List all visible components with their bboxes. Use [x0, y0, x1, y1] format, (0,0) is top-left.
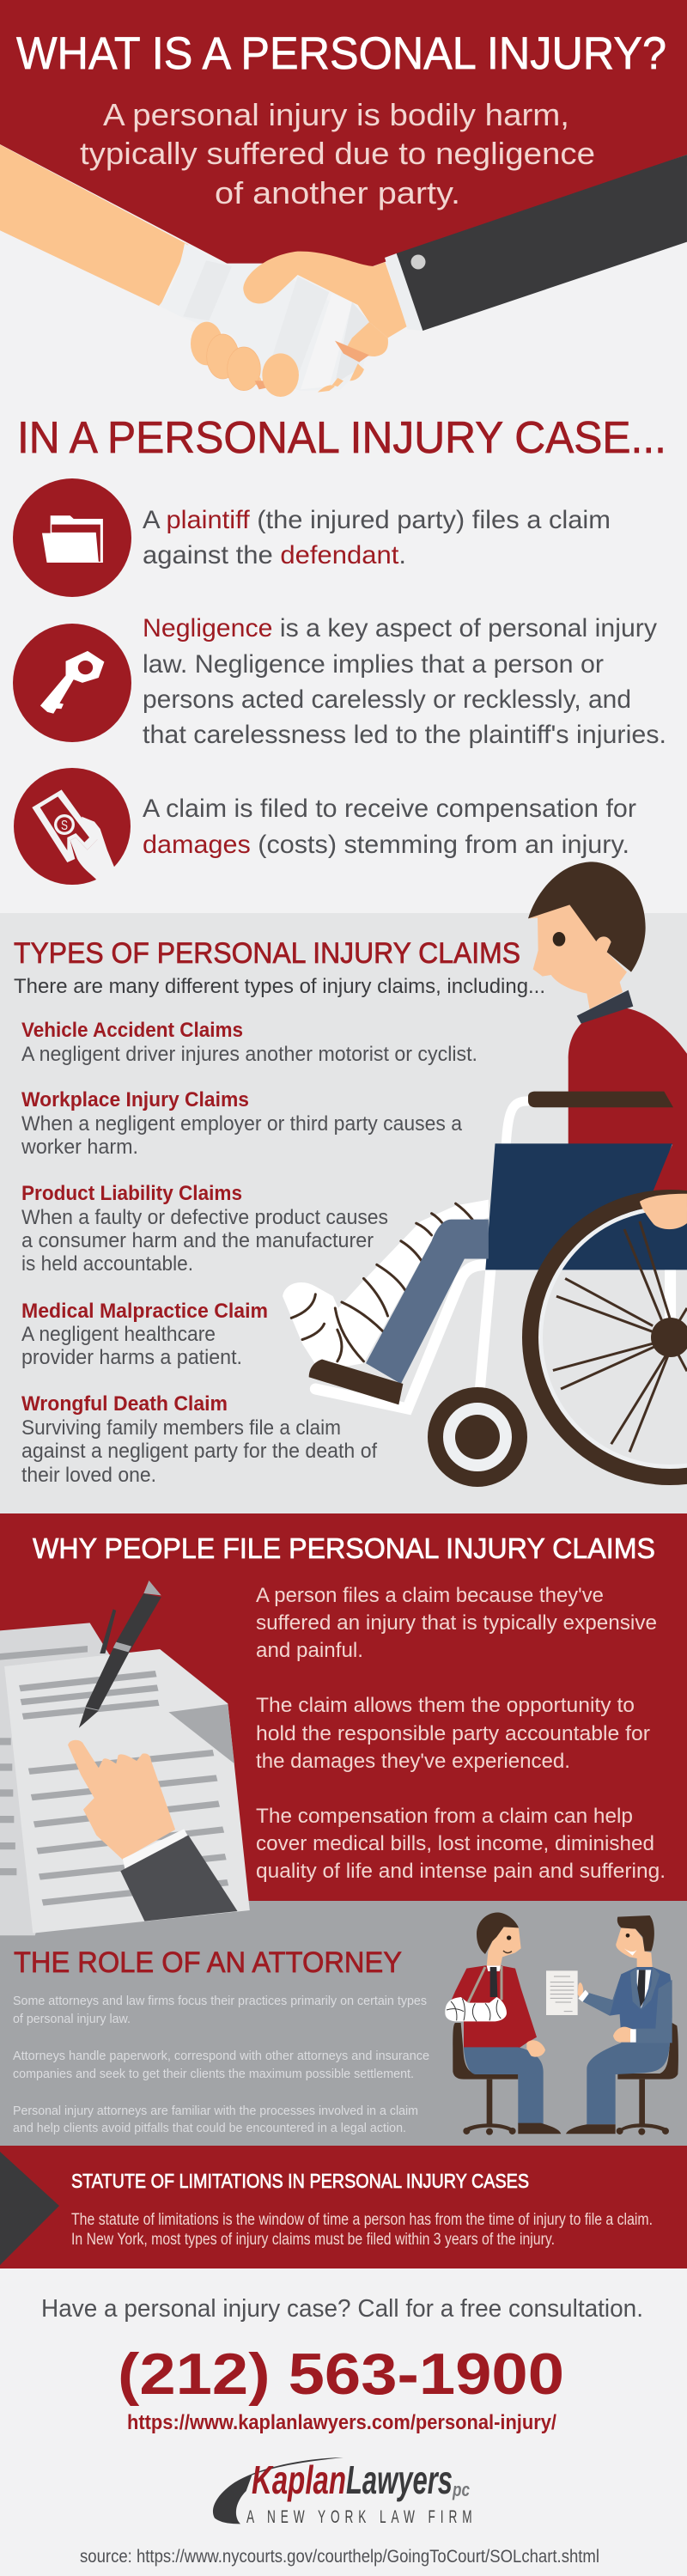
consultation line: Have a personal injury case? Call for a free consultation. — [41, 2295, 643, 2323]
subtitle: A personal injury is bodily harm, — [103, 97, 569, 132]
right hand — [243, 252, 407, 338]
logo: Lawyers — [346, 2457, 453, 2502]
torso — [568, 1007, 687, 1202]
intro: There are many different types of injury claims, including... — [14, 975, 545, 998]
panel: types of claims — [0, 862, 687, 1513]
logo: pc — [452, 2479, 470, 2500]
paragraph 3: and help clients avoid pitfalls that could be encountered in a legal action. — [13, 2121, 406, 2135]
cast — [283, 1200, 489, 1371]
claim: medical: Medical Malpractice Claim — [21, 1300, 268, 1323]
heading: TYPES OF PERSONAL INJURY CLAIMS — [14, 937, 520, 970]
paragraph 2: companies and seek to get their clients the maximum possible settlement. — [13, 2067, 414, 2081]
claim: wrongful death — [21, 1392, 377, 1487]
panel: role of an attorney — [0, 1901, 687, 2146]
logo — [213, 2457, 472, 2527]
panel background — [0, 1513, 687, 1901]
text: plaintiff: against the defendant. — [143, 541, 406, 569]
front page — [4, 1649, 250, 1934]
panel: in a personal injury case — [13, 413, 666, 887]
claim: product: Product Liability Claims — [21, 1182, 242, 1205]
paragraph 1: of personal injury law. — [13, 2012, 131, 2026]
cuff — [123, 1829, 187, 1869]
white frame — [506, 1101, 528, 1144]
left chair — [453, 2023, 518, 2135]
text: negligence: law. Negligence implies that a person or — [143, 650, 604, 679]
panel background — [0, 2146, 687, 2268]
paragraph 3: cover medical bills, lost income, diminished — [256, 1832, 654, 1855]
claim: wrongful death: Wrongful Death Claim — [21, 1392, 228, 1416]
logo: Kaplan — [252, 2457, 346, 2502]
pen — [79, 1580, 161, 1728]
paragraph 3: Personal injury attorneys are familiar with the processes involved in a claim — [13, 2104, 418, 2118]
illustration: man in wheelchair — [283, 862, 687, 1479]
paragraph 2 — [256, 1694, 650, 1773]
illustration: client and attorney — [445, 1912, 678, 2135]
source: source: https://www.nycourts.gov/courthelp/GoingToCourt/SOLchart.shtml — [80, 2547, 599, 2567]
icon: money in hand — [14, 768, 131, 887]
subtitle: typically suffered due to negligence — [80, 136, 595, 171]
text: plaintiff: A plaintiff (the injured party) files a claim — [143, 506, 611, 534]
sleeve — [120, 1836, 238, 1921]
claim: product: When a faulty or defective product causes — [21, 1206, 388, 1229]
text: negligence: Negligence is a key aspect of personal injury — [143, 614, 657, 642]
paragraph 2: Attorneys handle paperwork, correspond with other attorneys and insurance — [13, 2049, 429, 2063]
right sleeve — [397, 155, 687, 331]
subtitle — [80, 97, 595, 210]
paragraph 1 — [13, 1994, 427, 2026]
text: negligence: persons acted carelessly or recklessly, and — [143, 685, 631, 714]
text stripes — [20, 1674, 228, 1903]
claim: medical: provider harms a patient. — [21, 1346, 242, 1369]
document — [546, 1970, 578, 2015]
heading: STATUTE OF LIMITATIONS IN PERSONAL INJURY CASES — [71, 2170, 529, 2192]
leg — [366, 1220, 489, 1384]
seat — [485, 1143, 687, 1270]
paragraph 1: suffered an injury that is typically expensive — [256, 1611, 657, 1635]
claim: wrongful death: Surviving family members file a claim — [21, 1416, 341, 1440]
claim: medical — [21, 1300, 268, 1369]
claim: product: a consumer harm and the manufacturer — [21, 1229, 374, 1252]
paragraph 2: The claim allows them the opportunity to — [256, 1694, 635, 1717]
right chair — [617, 2023, 678, 2135]
panel: hero — [0, 0, 687, 397]
claim: workplace: worker harm. — [21, 1136, 138, 1159]
cuff — [385, 253, 423, 331]
claim: workplace: Workplace Injury Claims — [21, 1088, 249, 1111]
claim: medical: A negligent healthcare — [21, 1323, 216, 1346]
paragraph 1: and painful. — [256, 1639, 363, 1662]
heading: IN A PERSONAL INJURY CASE... — [17, 413, 666, 463]
icon: key — [13, 624, 131, 742]
panel: why people file — [0, 1513, 687, 1901]
back page — [0, 1623, 110, 1935]
caster wheel — [435, 1395, 520, 1479]
phone number: (212) 563-1900 — [118, 2342, 564, 2407]
body — [71, 2211, 653, 2249]
body: In New York, most types of injury claims must be filed within 3 years of the injury. — [71, 2231, 555, 2249]
client — [445, 1912, 561, 2134]
illustration: papers, pen and hand — [0, 1580, 250, 1935]
claim: wrongful death: against a negligent party for the death of — [21, 1440, 377, 1463]
claim: wrongful death: their loved one. — [21, 1464, 156, 1487]
paragraph 2: hold the responsible party accountable for — [256, 1722, 650, 1745]
sleeve button — [410, 254, 426, 270]
pointing hand — [68, 1740, 175, 1860]
big wheel — [541, 1208, 687, 1467]
panel: statute of limitations — [0, 2146, 687, 2268]
subtitle: of another party. — [215, 175, 460, 210]
illustration: handshake — [0, 144, 687, 397]
icon: folder — [13, 478, 131, 597]
text: damages: A claim is filed to receive compensation for — [143, 795, 636, 823]
url: https://www.kaplanlawyers.com/personal-injury/ — [127, 2411, 556, 2434]
claim: workplace — [21, 1088, 463, 1159]
panel background — [0, 1901, 687, 2146]
paragraph 3: The compensation from a claim can help — [256, 1805, 633, 1828]
panel background — [0, 913, 687, 1513]
panel: call to action — [41, 2295, 643, 2567]
hand on wheel — [640, 1194, 687, 1229]
paragraph 1: Some attorneys and law firms focus their practices primarily on certain types — [13, 1994, 427, 2008]
claim: vehicle: Vehicle Accident Claims — [21, 1019, 243, 1042]
left hand fingers — [196, 338, 264, 387]
paragraph 1: A person files a claim because they've — [256, 1584, 604, 1607]
chevron — [0, 2152, 59, 2265]
heading: THE ROLE OF AN ATTORNEY — [14, 1946, 402, 1979]
paragraph 3 — [256, 1805, 666, 1883]
icon: money in hand: S — [61, 819, 68, 833]
text: negligence: that carelessness led to the plaintiff's injuries. — [143, 721, 666, 749]
paragraph 3 — [13, 2104, 418, 2135]
paragraph 3: quality of life and intense pain and suffering. — [256, 1860, 666, 1883]
paragraph 2 — [13, 2049, 429, 2081]
claim: product: is held accountable. — [21, 1252, 193, 1276]
head and collar — [528, 862, 673, 1107]
paragraph 2: the damages they've experienced. — [256, 1750, 570, 1773]
claim: vehicle — [21, 1019, 477, 1066]
text: damages: damages (costs) stemming from an injury. — [143, 831, 629, 859]
title: WHAT IS A PERSONAL INJURY? — [16, 28, 666, 79]
left arm — [0, 144, 188, 307]
text: negligence — [143, 614, 666, 749]
page fold — [168, 1704, 234, 1763]
text: damages — [143, 795, 636, 859]
bandaged hand — [159, 243, 407, 397]
claim: vehicle: A negligent driver injures another motorist or cyclist. — [21, 1043, 477, 1066]
text: plaintiff — [143, 506, 611, 569]
paragraph 1 — [256, 1584, 657, 1662]
attorney — [546, 1915, 672, 2134]
claim: product — [21, 1182, 388, 1276]
shoe — [309, 1360, 403, 1404]
hero red banner — [0, 0, 687, 266]
heading: WHY PEOPLE FILE PERSONAL INJURY CLAIMS — [33, 1532, 655, 1564]
logo: A NEW YORK LAW FIRM — [246, 2506, 472, 2527]
claim: workplace: When a negligent employer or third party causes a — [21, 1112, 463, 1136]
